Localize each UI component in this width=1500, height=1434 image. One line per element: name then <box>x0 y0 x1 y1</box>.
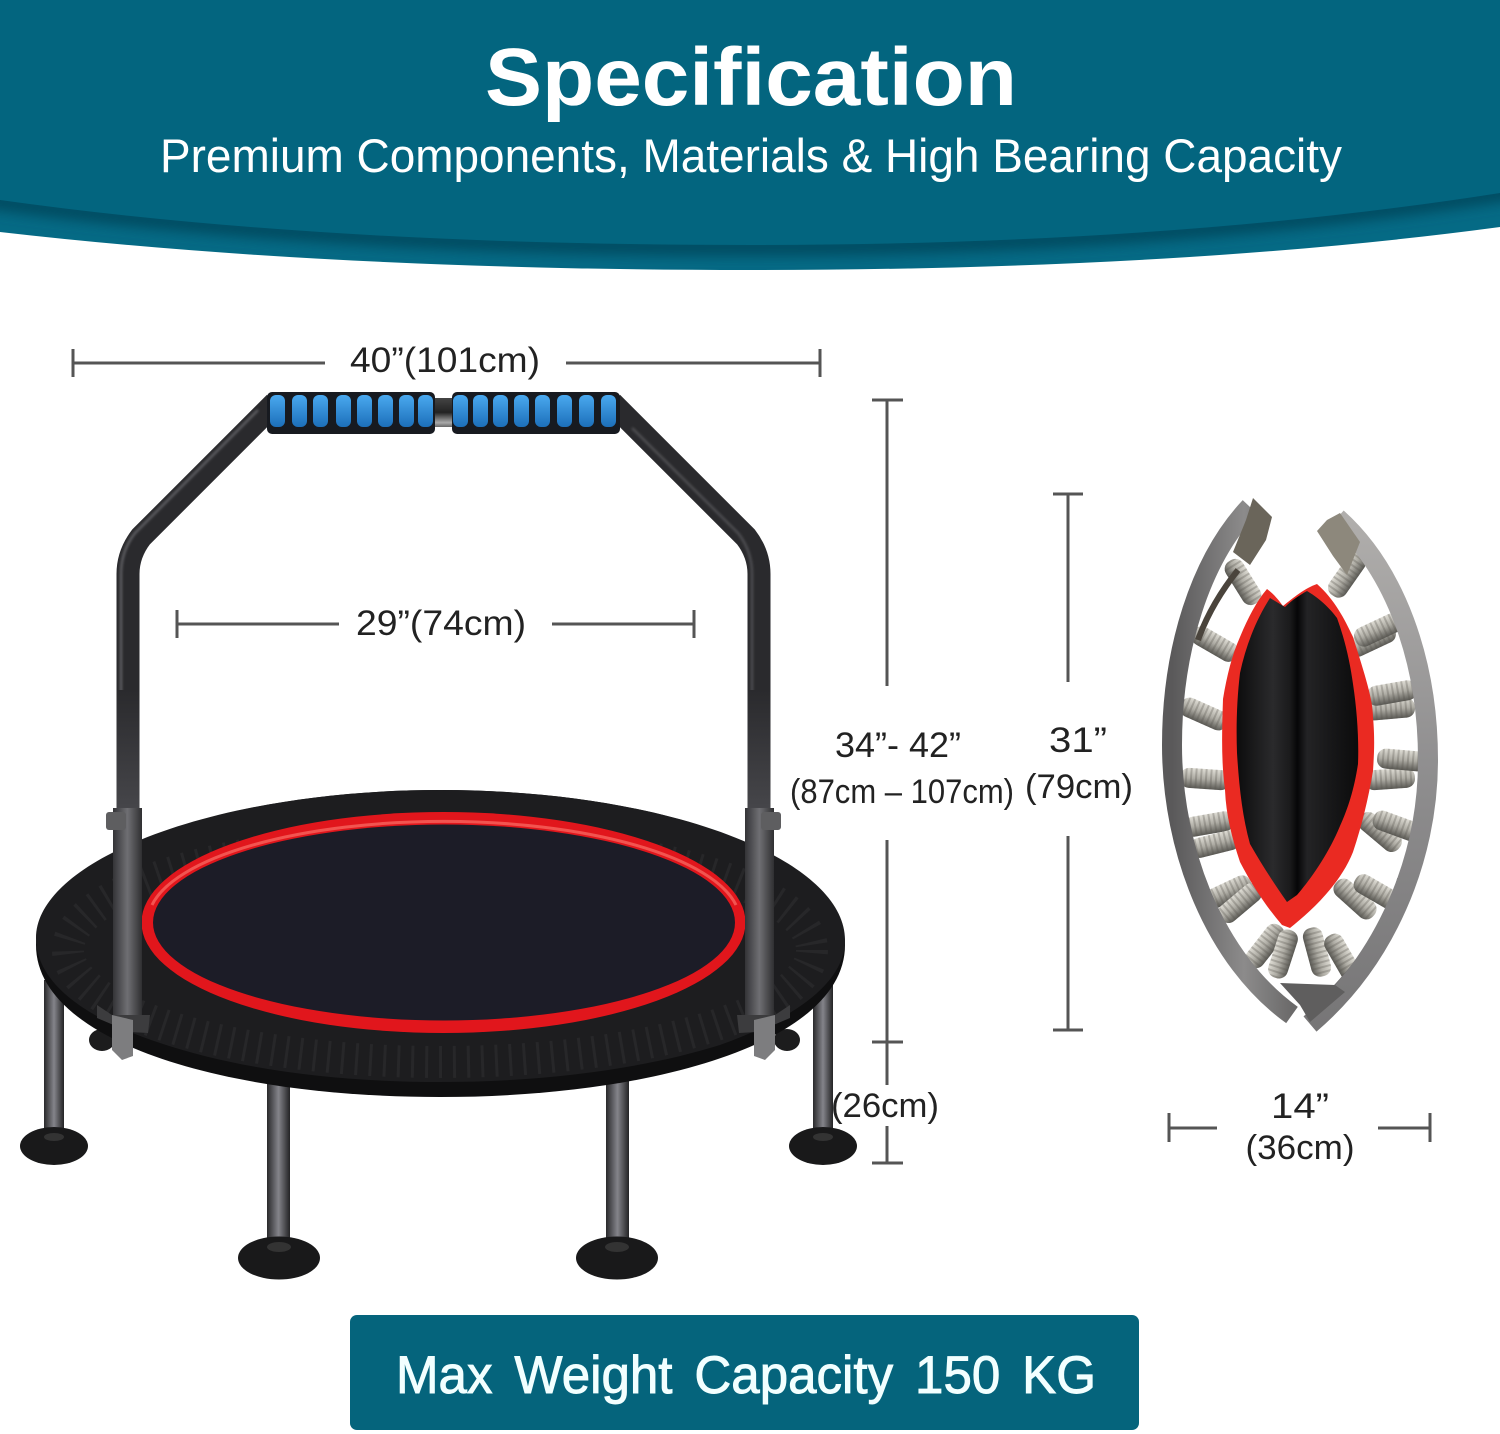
dimension: folded height: 31” <box>1049 721 1107 760</box>
dimension: leg height <box>831 1042 939 1163</box>
foam grip <box>267 392 620 434</box>
dimension: total height: 34”- 42” <box>835 726 961 765</box>
height lock knobs <box>106 812 781 830</box>
dimension: total height <box>790 400 1014 1042</box>
subtitle: Premium Components, Materials & High Bearing Capacity <box>160 129 1342 182</box>
dimension: folded height <box>1025 494 1133 1030</box>
dimension: folded width <box>1169 1087 1430 1167</box>
leg brackets <box>97 1005 790 1060</box>
title: Specification <box>485 32 1017 123</box>
dimension: overall width <box>73 341 820 380</box>
callout: max weight capacity: Max Weight Capacity 150 KG <box>396 1346 1096 1405</box>
jumping mat with red ring <box>142 812 746 1033</box>
right inner rail <box>1318 880 1405 1012</box>
dimension: mat width <box>177 604 694 643</box>
dimension: total height: (87cm – 107cm) <box>790 773 1014 811</box>
springs <box>1177 549 1428 984</box>
inner left frame shadow arc <box>1198 570 1238 640</box>
dimension: folded height: (79cm) <box>1025 768 1133 806</box>
left frame arc <box>1172 507 1292 1015</box>
dimension: mat width: 29”(74cm) <box>356 604 526 643</box>
frame skirt <box>36 790 845 1097</box>
right frame arc <box>1310 518 1428 1024</box>
trampoline illustration <box>20 392 857 1280</box>
front legs <box>20 980 857 1280</box>
frame brackets <box>1233 498 1272 565</box>
folded trampoline <box>1172 498 1428 1024</box>
back legs <box>89 1029 800 1051</box>
handlebar frame <box>97 403 790 1060</box>
header banner <box>0 0 1500 270</box>
dimension: overall width: 40”(101cm) <box>350 341 540 380</box>
folded black mat with red binding <box>1222 584 1374 928</box>
dimension: folded width: (36cm) <box>1246 1129 1354 1167</box>
dimension: folded width: 14” <box>1271 1087 1329 1126</box>
dimension: leg height: (26cm) <box>831 1087 939 1125</box>
callout: max weight capacity <box>350 1315 1139 1430</box>
